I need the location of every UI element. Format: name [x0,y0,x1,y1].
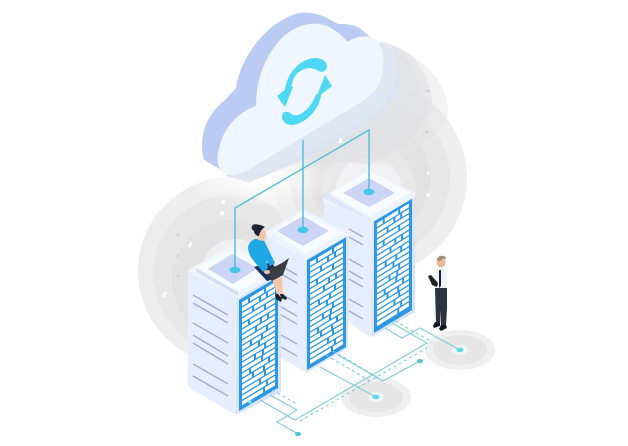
woman hand [264,270,270,274]
woman neck and head [258,230,266,241]
man tablet [428,275,438,287]
woman skirt [254,262,280,281]
server 1 body [188,270,238,414]
server 2 brick panel [307,236,346,370]
man head [436,256,446,268]
woman with laptop [248,224,289,302]
server 1 right edge [236,272,281,415]
server 2 right edge [306,235,348,373]
server 3 stripes [349,229,363,319]
cloud right thickness [225,42,396,182]
server 2 stripes [281,266,297,356]
server 1 brick panel [239,277,278,411]
decorative dots [162,90,430,298]
cloud receding shadow layers [226,42,448,182]
man hair [437,256,446,262]
icon: sync arrows [277,58,332,125]
man standing [428,256,447,331]
background circles right [273,81,467,275]
server 1 [188,245,281,415]
server 1 top cap [188,245,281,298]
floor pad left [341,377,411,417]
woman legs [272,277,283,297]
server 1 status light [248,400,252,404]
circuit nodes [295,348,464,436]
circuit lines [260,321,460,434]
server 1 stripes [193,295,228,396]
server 2 top cap [266,209,348,260]
woman sweater [248,239,275,272]
wire end dots [230,189,374,273]
background circles left [138,177,326,365]
server 3 brick panel [374,198,412,333]
woman shoes [275,294,287,302]
server 3 body [324,200,374,337]
cloud face [218,24,384,175]
man trousers [435,288,447,326]
server 3 [323,170,415,337]
woman hair [252,224,265,236]
cloud back edge [202,13,385,172]
laptop [264,258,289,281]
server 2 body [267,236,307,373]
server 2 [266,209,348,373]
server 3 right edge [372,196,415,337]
floor pad right [425,330,495,370]
man shoes [433,322,447,331]
white glow under cloud [187,148,337,208]
man shirt [435,267,447,288]
connection wires to cloud [235,130,369,270]
server 3 top cap [323,170,415,222]
cloud [202,13,396,182]
man tie [439,270,441,288]
